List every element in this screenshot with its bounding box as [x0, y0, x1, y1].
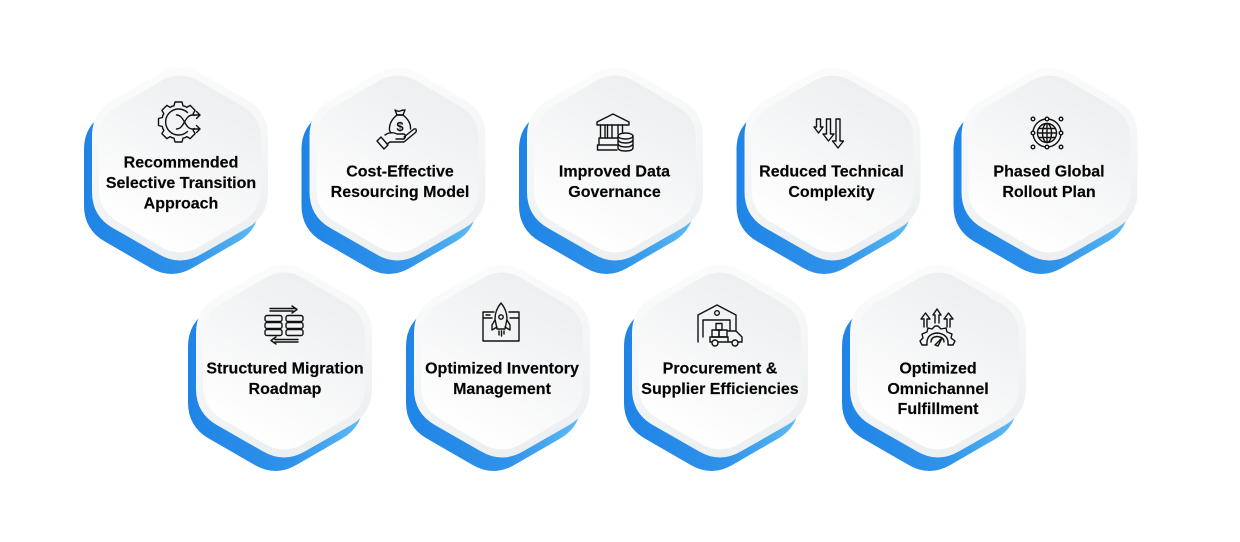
card: Phased Global Rollout Plan [954, 68, 1138, 274]
label: Supplier Efficiencies [641, 381, 799, 398]
card: Optimized Omnichannel Fulfillment [842, 264, 1026, 471]
label: Recommended [124, 154, 238, 172]
icon: rocket in browser window [483, 303, 519, 341]
label: Structured Migration [206, 360, 364, 378]
label: Rollout Plan [1002, 184, 1096, 201]
label: Improved Data [559, 164, 670, 180]
label: Optimized [899, 360, 977, 378]
card: Improved Data Governance [519, 68, 703, 274]
label: Complexity [788, 184, 875, 201]
label: Fulfillment [898, 401, 979, 418]
card: Cost-Effective Resourcing Model [302, 68, 486, 274]
label [993, 164, 1105, 201]
icon: networked globe [1031, 117, 1063, 149]
icon: bank with database [597, 114, 633, 151]
label: Governance [568, 184, 661, 201]
label: Phased Global [993, 164, 1105, 180]
icon: hand holding money bag [377, 110, 416, 149]
label [759, 164, 904, 201]
label: Reduced Technical [759, 164, 904, 180]
icon: hand holding money bag: $ [396, 119, 404, 134]
card: Recommended Selective Transition Approach [84, 68, 268, 274]
label: Management [453, 381, 552, 398]
label [106, 154, 256, 212]
label: Optimized Inventory [425, 360, 579, 378]
card: Structured Migration Roadmap [188, 264, 372, 471]
label [331, 164, 469, 201]
icon: gear gauge with up arrows [920, 309, 955, 346]
label: Selective Transition [106, 175, 256, 192]
label [206, 360, 364, 398]
label: Approach [144, 196, 218, 212]
card: Procurement & Supplier Efficiencies [624, 264, 808, 471]
card: Reduced Technical Complexity [736, 68, 920, 274]
label: Cost-Effective [346, 164, 454, 180]
icon: three down arrows [814, 119, 844, 148]
label: Procurement & [663, 360, 778, 378]
label [887, 360, 989, 418]
label: Omnichannel [887, 381, 989, 398]
label: Resourcing Model [331, 184, 469, 201]
card: Optimized Inventory Management [406, 264, 590, 471]
label [425, 360, 579, 398]
icon: servers with migration arrows [265, 306, 303, 344]
label [559, 164, 670, 201]
label [641, 360, 799, 398]
label: Roadmap [249, 381, 322, 398]
icon: gear with crossing arrows [158, 102, 200, 142]
icon: warehouse with delivery truck [698, 305, 742, 346]
